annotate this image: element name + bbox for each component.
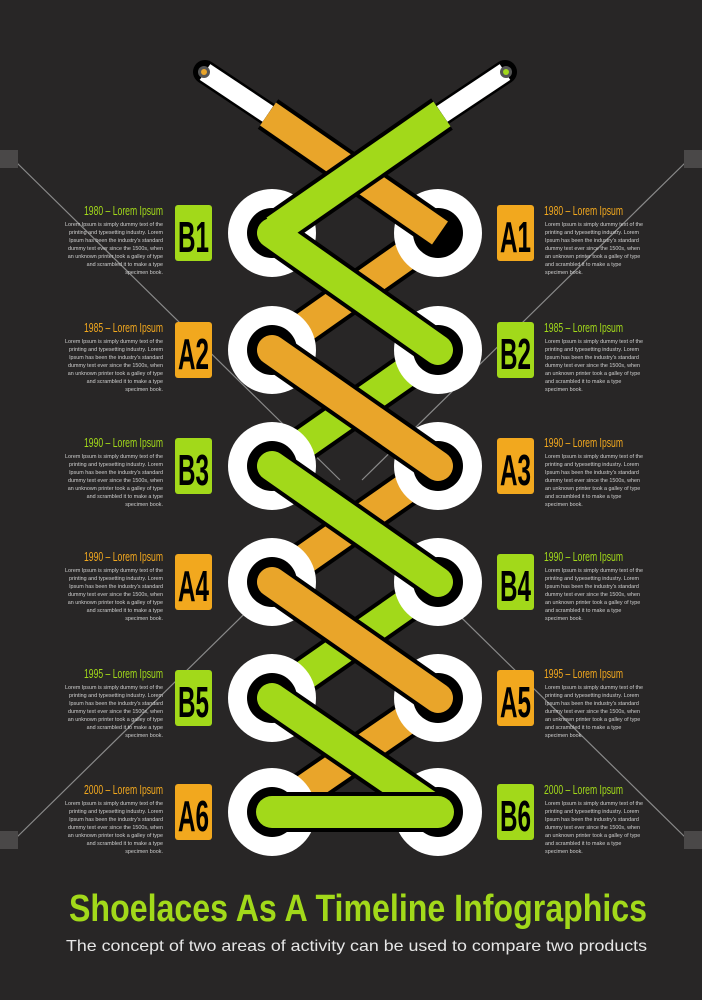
body text right: Ipsum has been the industry's standard (545, 470, 639, 476)
body text left: an unknown printer took a galley of type (68, 371, 163, 377)
body text right: printing and typesetting industry. Lorem (545, 462, 639, 468)
body text left: Ipsum has been the industry's standard (69, 584, 163, 590)
right labels: B6 (500, 792, 531, 841)
right labels (497, 203, 623, 841)
body text right: specimen book. (545, 270, 583, 276)
body text right: dummy text ever since the 1500s, when (545, 478, 640, 484)
body text right: printing and typesetting industry. Lorem (545, 347, 639, 353)
body text left: printing and typesetting industry. Lorem (69, 693, 163, 699)
body text right: specimen book. (545, 502, 583, 508)
body text right: an unknown printer took a galley of type (545, 600, 640, 606)
body text left: and scrambled it to make a type (87, 841, 163, 847)
body text right: dummy text ever since the 1500s, when (545, 246, 640, 252)
body text left: and scrambled it to make a type (87, 494, 163, 500)
body text left: an unknown printer took a galley of type (68, 717, 163, 723)
body text right: an unknown printer took a galley of type (545, 371, 640, 377)
body text left: and scrambled it to make a type (87, 725, 163, 731)
left labels: B3 (178, 446, 209, 495)
eyelets (228, 189, 482, 856)
body text right: Ipsum has been the industry's standard (545, 355, 639, 361)
body text left: printing and typesetting industry. Lorem (69, 462, 163, 468)
body text left: specimen book. (125, 387, 163, 393)
under laces (272, 233, 438, 812)
right labels: 1990 – Lorem Ipsum (544, 549, 623, 564)
right labels: 1985 – Lorem Ipsum (544, 320, 623, 335)
left labels: A6 (178, 792, 209, 841)
right labels: A3 (500, 446, 531, 495)
body text left: dummy text ever since the 1500s, when (68, 246, 163, 252)
body text left: specimen book. (125, 270, 163, 276)
left labels: 1985 – Lorem Ipsum (84, 320, 163, 335)
over laces (268, 114, 442, 812)
body text left: Ipsum has been the industry's standard (69, 701, 163, 707)
body text left: and scrambled it to make a type (87, 608, 163, 614)
body text left: Lorem Ipsum is simply dummy text of the (65, 454, 163, 460)
aglets (198, 66, 512, 114)
body text right: an unknown printer took a galley of type (545, 833, 640, 839)
body text left: dummy text ever since the 1500s, when (68, 363, 163, 369)
body text left: an unknown printer took a galley of type (68, 254, 163, 260)
right labels: B4 (500, 562, 531, 611)
body text right: and scrambled it to make a type (545, 841, 621, 847)
body text left: dummy text ever since the 1500s, when (68, 478, 163, 484)
body text left: Lorem Ipsum is simply dummy text of the (65, 339, 163, 345)
right labels: 2000 – Lorem Ipsum (544, 782, 623, 797)
left labels: 1990 – Lorem Ipsum (84, 435, 163, 450)
body text right: specimen book. (545, 849, 583, 855)
right labels: A5 (500, 678, 531, 727)
body text right: an unknown printer took a galley of type (545, 717, 640, 723)
body text right: dummy text ever since the 1500s, when (545, 363, 640, 369)
body text left: Lorem Ipsum is simply dummy text of the (65, 801, 163, 807)
left labels: A4 (178, 562, 209, 611)
right labels: 1990 – Lorem Ipsum (544, 435, 623, 450)
body text right: and scrambled it to make a type (545, 494, 621, 500)
body text left: printing and typesetting industry. Lorem (69, 347, 163, 353)
left labels: 1995 – Lorem Ipsum (84, 666, 163, 681)
body text right: and scrambled it to make a type (545, 262, 621, 268)
body text right: specimen book. (545, 616, 583, 622)
body text right: Lorem Ipsum is simply dummy text of the (545, 339, 643, 345)
body text left: and scrambled it to make a type (87, 379, 163, 385)
body text right: Lorem Ipsum is simply dummy text of the (545, 454, 643, 460)
body text left: Lorem Ipsum is simply dummy text of the (65, 568, 163, 574)
body text right: Lorem Ipsum is simply dummy text of the (545, 222, 643, 228)
subtitle: The concept of two areas of activity can be used to compare two products (66, 938, 647, 955)
body text right (545, 222, 643, 855)
body text right: printing and typesetting industry. Lorem (545, 809, 639, 815)
body text right: Ipsum has been the industry's standard (545, 701, 639, 707)
body text left: specimen book. (125, 849, 163, 855)
body text right: Ipsum has been the industry's standard (545, 584, 639, 590)
body text right: printing and typesetting industry. Lorem (545, 693, 639, 699)
body text left: dummy text ever since the 1500s, when (68, 592, 163, 598)
body text right: specimen book. (545, 387, 583, 393)
left labels: B5 (178, 678, 209, 727)
body text left: Ipsum has been the industry's standard (69, 238, 163, 244)
left labels (84, 203, 212, 841)
body text right: and scrambled it to make a type (545, 379, 621, 385)
body text left: Lorem Ipsum is simply dummy text of the (65, 685, 163, 691)
body text left: printing and typesetting industry. Lorem (69, 809, 163, 815)
body text right: Ipsum has been the industry's standard (545, 817, 639, 823)
body text right: an unknown printer took a galley of type (545, 254, 640, 260)
right labels: A1 (500, 213, 531, 262)
body text left: specimen book. (125, 616, 163, 622)
body text left: dummy text ever since the 1500s, when (68, 709, 163, 715)
right labels: 1980 – Lorem Ipsum (544, 203, 623, 218)
left labels: B1 (178, 213, 209, 262)
body text left: Lorem Ipsum is simply dummy text of the (65, 222, 163, 228)
body text right: and scrambled it to make a type (545, 608, 621, 614)
body text right: printing and typesetting industry. Lorem (545, 230, 639, 236)
body text right: Ipsum has been the industry's standard (545, 238, 639, 244)
body text right: printing and typesetting industry. Lorem (545, 576, 639, 582)
body text left: an unknown printer took a galley of type (68, 833, 163, 839)
left labels: A2 (178, 330, 209, 379)
body text right: dummy text ever since the 1500s, when (545, 592, 640, 598)
body text right: specimen book. (545, 733, 583, 739)
body text left: Ipsum has been the industry's standard (69, 470, 163, 476)
right labels: B2 (500, 330, 531, 379)
body text left: and scrambled it to make a type (87, 262, 163, 268)
left labels: 1990 – Lorem Ipsum (84, 549, 163, 564)
body text right: dummy text ever since the 1500s, when (545, 825, 640, 831)
body text left: an unknown printer took a galley of type (68, 600, 163, 606)
body text right: and scrambled it to make a type (545, 725, 621, 731)
body text left: printing and typesetting industry. Lorem (69, 576, 163, 582)
body text left: Ipsum has been the industry's standard (69, 355, 163, 361)
right labels: 1995 – Lorem Ipsum (544, 666, 623, 681)
body text right: an unknown printer took a galley of type (545, 486, 640, 492)
body text left (65, 222, 163, 855)
body text right: Lorem Ipsum is simply dummy text of the (545, 568, 643, 574)
left labels: 2000 – Lorem Ipsum (84, 782, 163, 797)
body text left: specimen book. (125, 733, 163, 739)
left labels: 1980 – Lorem Ipsum (84, 203, 163, 218)
body text left: specimen book. (125, 502, 163, 508)
body text right: dummy text ever since the 1500s, when (545, 709, 640, 715)
body text left: an unknown printer took a galley of type (68, 486, 163, 492)
body text right: Lorem Ipsum is simply dummy text of the (545, 801, 643, 807)
body text right: Lorem Ipsum is simply dummy text of the (545, 685, 643, 691)
body text left: printing and typesetting industry. Lorem (69, 230, 163, 236)
body text left: dummy text ever since the 1500s, when (68, 825, 163, 831)
body text left: Ipsum has been the industry's standard (69, 817, 163, 823)
